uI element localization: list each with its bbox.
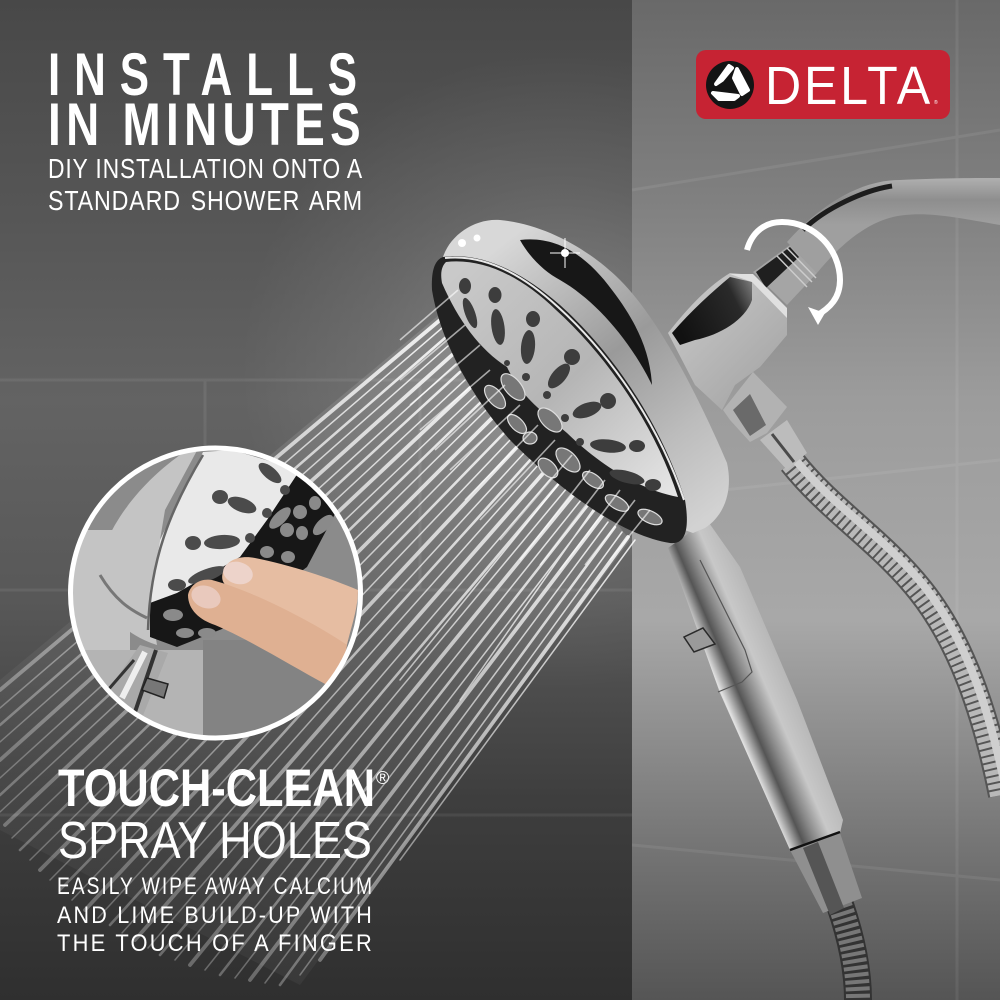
spray holes in dark band — [481, 370, 664, 528]
registered mark: ® — [934, 99, 938, 106]
text: easily wipe away — [57, 873, 374, 957]
text: DIY installation — [48, 153, 363, 216]
silver plate — [441, 261, 678, 497]
heading: installs in minutes — [48, 41, 371, 158]
inset background — [60, 440, 370, 750]
logo wordmark: DELTA — [765, 56, 933, 116]
logo: Delta — [696, 50, 950, 119]
sparkles — [458, 234, 580, 268]
inset dark band — [150, 470, 337, 647]
icon: Delta emblem — [706, 61, 754, 109]
water spray streams — [0, 310, 635, 985]
inset plate holes — [168, 459, 290, 591]
heading: Touch-Clean: ® — [376, 768, 389, 788]
handle inner outline — [700, 560, 752, 692]
nails — [223, 562, 253, 584]
text: DIY installation: DIY INSTALLATION ONTO A — [48, 153, 363, 184]
inset head back — [112, 452, 196, 645]
subheading: Spray holes: SPRAY HOLES — [58, 812, 372, 870]
text: easily wipe away: THE TOUCH OF A FINGER — [57, 930, 374, 957]
shower arm and swivel mount — [668, 178, 1000, 470]
spray over face — [400, 290, 650, 570]
heading: installs in minutes: IN MINUTES — [48, 91, 366, 158]
hand shower handle — [668, 520, 862, 915]
thin rim highlight — [445, 257, 684, 500]
trigger switch — [684, 628, 715, 652]
rotation arrow — [747, 222, 840, 325]
inset handle — [108, 645, 168, 718]
shower head — [432, 220, 729, 543]
text: DIY installation: STANDARD SHOWER ARM — [48, 185, 363, 216]
inset plate — [150, 450, 300, 603]
head back shell — [443, 220, 729, 533]
inset band holes — [163, 496, 336, 638]
text: easily wipe away: EASILY WIPE AWAY CALCIUM — [57, 873, 374, 900]
top finger — [222, 557, 358, 645]
inset ring — [70, 448, 360, 738]
lower finger — [188, 580, 347, 685]
heading: Touch-Clean: TOUCH-CLEAN — [58, 759, 375, 818]
dark reflection — [520, 239, 652, 385]
spray holes on plate — [459, 278, 661, 491]
inset rim — [148, 455, 203, 630]
coiled hose — [792, 458, 1000, 795]
heading: installs in minutes: INSTALLS — [48, 41, 371, 108]
spray face rim — [432, 256, 687, 543]
lower hose — [840, 905, 858, 1000]
text: easily wipe away: AND LIME BUILD-UP WITH — [57, 902, 374, 929]
inset circle: fingers wiping spray holes — [68, 446, 363, 740]
